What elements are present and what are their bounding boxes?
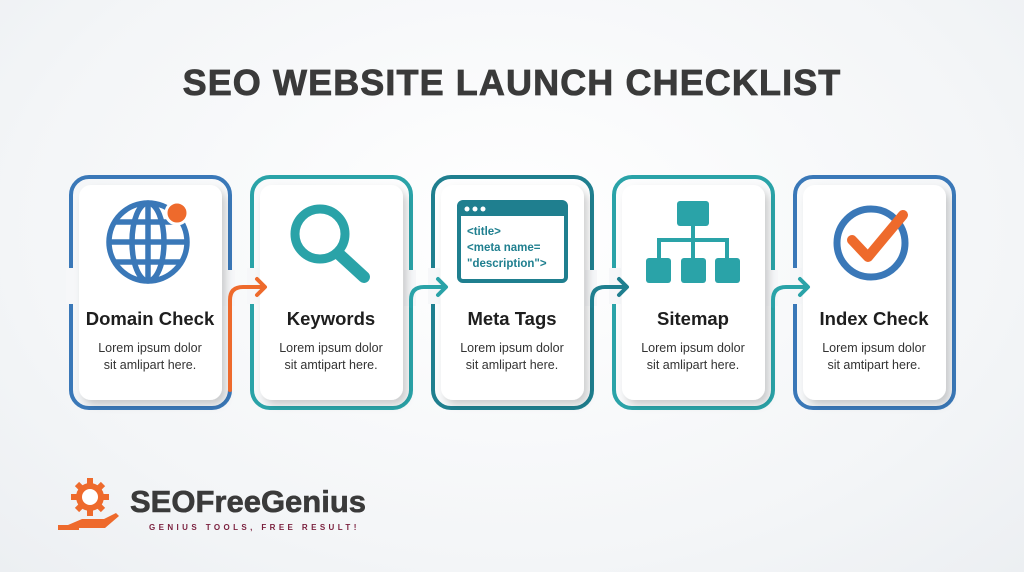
card: Index Check: Index Check [820,308,929,329]
icon: sitemap [646,201,740,283]
card: Domain Check [66,177,235,408]
card: Meta Tags: sit amlipart here. [466,358,558,372]
card: Keywords [247,177,416,408]
icon: gear hand [58,478,119,530]
card: Index Check: sit amtipart here. [827,358,921,372]
card: Meta Tags: Meta Tags [467,308,557,329]
arrow 4 [773,279,808,306]
logo [58,478,366,532]
card: Sitemap [609,177,778,408]
arrow 1 [230,279,265,390]
icon: globe [109,203,187,281]
card: Domain Check: sit amlipart here. [104,358,196,372]
card: Keywords: Keywords [287,308,375,329]
card: Index Check: Lorem ipsum dolor [822,341,926,355]
icon: code window: <title> [467,226,501,238]
card: Domain Check: Lorem ipsum dolor [98,341,202,355]
card: Sitemap: sit amlipart here. [647,358,739,372]
card: Sitemap: Lorem ipsum dolor [641,341,745,355]
icon: magnifier [295,209,364,277]
card: Meta Tags: Lorem ipsum dolor [460,341,564,355]
logo: GENIUS TOOLS, FREE RESULT! [149,523,360,532]
card: Domain Check: Domain Check [86,308,215,329]
arrow 2 [411,279,446,306]
icon: code window: "description"> [467,258,547,270]
logo: SEOFreeGenius [130,484,366,519]
card: Keywords: sit amtipart here. [284,358,378,372]
title: SEO WEBSITE LAUNCH CHECKLIST [183,62,841,103]
card: Meta Tags [428,177,597,408]
icon: code window [459,202,566,281]
icon: check circle [837,209,905,277]
card: Keywords: Lorem ipsum dolor [279,341,383,355]
card: Sitemap: Sitemap [657,308,729,329]
arrow 3 [592,279,627,306]
card: Index Check [790,177,954,408]
icon: code window: <meta name= [467,242,541,254]
